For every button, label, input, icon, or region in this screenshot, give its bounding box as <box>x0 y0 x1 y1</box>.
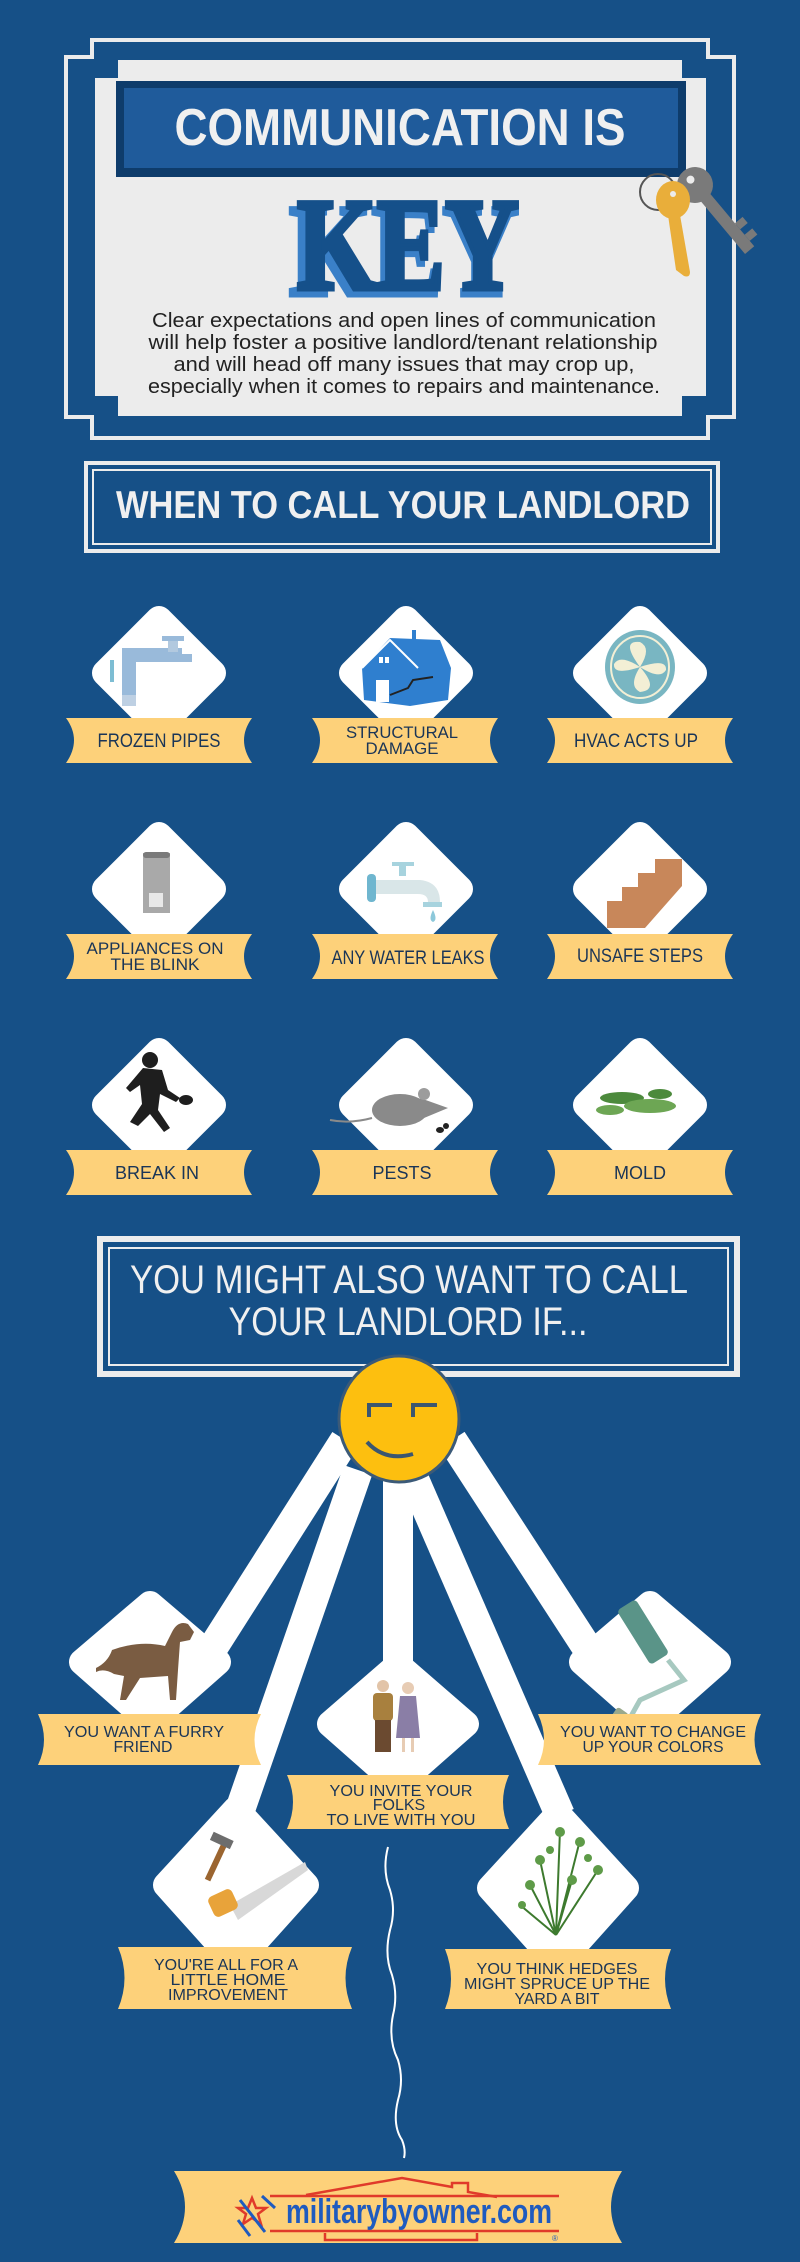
panel: structural damage <box>312 619 498 763</box>
heading: when to call your landlord <box>86 463 718 551</box>
label: FOLKS <box>373 1797 425 1814</box>
panel: home improvement <box>118 1809 352 2009</box>
icon: fan <box>605 630 675 704</box>
panel: break in <box>66 1051 252 1195</box>
connector legs <box>205 1440 595 1815</box>
intro paragraph: Clear expectations and open lines of communication <box>152 310 656 332</box>
label <box>66 934 252 979</box>
panel: invite folks <box>287 1665 509 1829</box>
intro paragraph: will help foster a positive landlord/tenant relationship <box>147 332 657 354</box>
label <box>66 1150 252 1195</box>
icon: keys <box>640 160 763 276</box>
label: YOU'RE ALL FOR A <box>154 1957 298 1974</box>
label <box>287 1775 509 1829</box>
header panel <box>66 40 763 438</box>
icon: stairs <box>607 859 682 928</box>
icon: rat <box>330 1088 449 1133</box>
icon: house outline <box>270 2178 559 2240</box>
label: BREAK IN <box>115 1163 199 1183</box>
panel: furry friend <box>38 1604 261 1765</box>
label: TO LIVE WITH YOU <box>326 1812 476 1829</box>
icon: hammer and saw <box>205 1832 308 1920</box>
label <box>547 934 733 979</box>
title bar <box>116 81 686 177</box>
label: YOU THINK HEDGES <box>476 1961 638 1978</box>
label: UNSAFE STEPS <box>577 946 703 967</box>
label <box>312 718 498 763</box>
label: YOU WANT TO CHANGE <box>560 1724 746 1741</box>
wavy line <box>385 1847 405 2158</box>
icon: faucet <box>367 862 442 922</box>
heading: you might also want to call <box>100 1239 737 1374</box>
label: YOU INVITE YOUR <box>330 1783 472 1800</box>
label <box>312 1150 498 1195</box>
KEY word: KEY <box>297 171 519 318</box>
label <box>118 1947 352 2009</box>
label: ANY WATER LEAKS <box>332 948 484 969</box>
panel: mold <box>547 1051 733 1195</box>
label <box>538 1714 761 1765</box>
label <box>547 718 733 763</box>
intro paragraph: especially when it comes to repairs and maintenance. <box>148 376 660 398</box>
icon: star <box>238 2196 275 2236</box>
label: PESTS <box>372 1163 432 1183</box>
label: YARD A BIT <box>514 1991 600 2008</box>
face <box>339 1356 459 1482</box>
icon: frozen pipes <box>110 636 192 706</box>
icon: paint roller <box>601 1599 684 1739</box>
icon: dog <box>96 1623 194 1700</box>
label <box>38 1714 261 1765</box>
label: FROZEN PIPES <box>98 731 220 752</box>
logo banner: militarybyowner.com <box>286 2193 552 2231</box>
intro paragraph <box>147 310 660 398</box>
label: LITTLE HOME <box>170 1972 286 1989</box>
panel: hvac <box>547 619 733 763</box>
title bar: COMMUNICATION IS <box>174 99 626 157</box>
label <box>66 718 252 763</box>
KEY word: KEY <box>289 177 519 324</box>
icon: mold <box>596 1089 676 1115</box>
label: APPLIANCES ON <box>86 939 224 958</box>
icon: folks <box>373 1680 420 1752</box>
label: THE BLINK <box>110 955 200 974</box>
label: HVAC ACTS UP <box>574 731 698 752</box>
icon: hedge <box>518 1827 603 1935</box>
label: UP YOUR COLORS <box>582 1739 724 1756</box>
label: YOU WANT A FURRY <box>64 1724 224 1741</box>
panel: appliances <box>66 835 252 979</box>
label: FRIEND <box>114 1739 172 1756</box>
logo banner: ® <box>552 2234 558 2243</box>
heading: you might also want to call: YOU MIGHT ALSO WANT TO CALL <box>130 1258 688 1302</box>
panel: pests <box>312 1051 498 1195</box>
heading: when to call your landlord: WHEN TO CALL YOUR LANDLORD <box>116 484 690 527</box>
label: STRUCTURAL <box>346 723 458 742</box>
icon: appliance <box>143 852 170 913</box>
label <box>445 1949 671 2009</box>
icon: house <box>362 630 451 706</box>
intro paragraph: and will head off many issues that may crop up, <box>174 354 634 376</box>
panel: change colors <box>538 1599 761 1765</box>
label <box>547 1150 733 1195</box>
icon: burglar <box>126 1052 193 1132</box>
logo banner <box>174 2171 622 2243</box>
panel: unsafe steps <box>547 835 733 979</box>
label: DAMAGE <box>366 739 438 758</box>
panel: water leaks <box>312 835 498 979</box>
label: MIGHT SPRUCE UP THE <box>464 1976 650 1993</box>
panel: frozen pipes <box>66 619 252 763</box>
panel: hedges <box>445 1814 671 2009</box>
label: MOLD <box>614 1163 666 1183</box>
heading: you might also want to call: YOUR LANDLORD IF... <box>228 1300 588 1344</box>
label: IMPROVEMENT <box>168 1987 288 2004</box>
label <box>312 934 498 979</box>
